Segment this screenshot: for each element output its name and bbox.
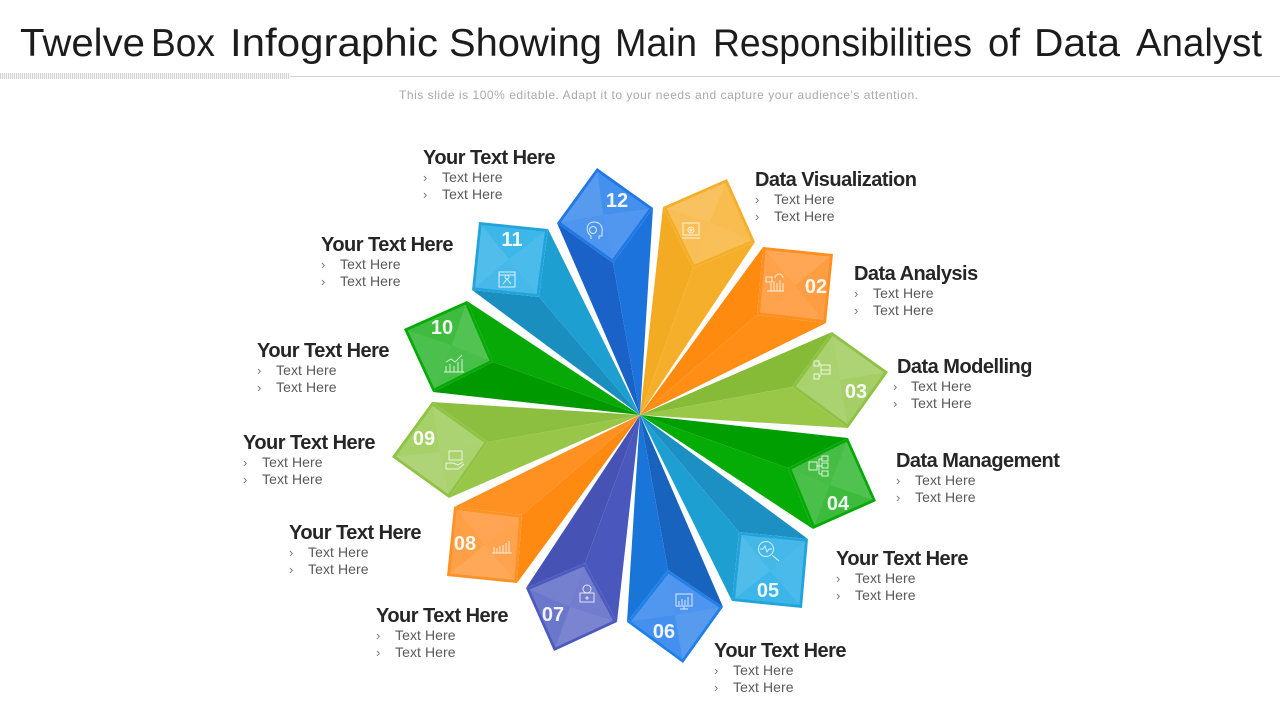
title: Data — [1034, 22, 1120, 65]
label 01: Data Visualization: › — [755, 209, 759, 224]
box 06 blue — [627, 415, 723, 663]
icon: monitor bars — [676, 594, 692, 609]
label 12: Text Here — [442, 169, 503, 185]
label 06: Your Text Here — [714, 640, 846, 662]
title: Analyst — [1136, 22, 1262, 65]
box 11 sky blue — [472, 222, 640, 415]
box 04 green — [640, 415, 876, 529]
label 12: Your Text Here — [423, 147, 555, 169]
label 02: Data Analysis: Data Analysis — [854, 263, 978, 285]
icon: monitor — [682, 223, 700, 238]
label 11: Your Text Here — [321, 234, 453, 256]
number 11: 11 — [501, 229, 523, 251]
title: Showing — [449, 22, 602, 65]
label 02: Data Analysis — [854, 263, 978, 318]
number 04: 04 — [827, 493, 850, 515]
label 06: Text Here — [733, 679, 794, 695]
label 01: Data Visualization — [755, 169, 916, 224]
label 11: Text Here — [340, 273, 401, 289]
label 03: Data Modelling: Text Here — [911, 378, 972, 394]
label 07: Text Here — [395, 644, 456, 660]
label 05: Text Here — [855, 570, 916, 586]
label 01: Data Visualization: Data Visualization — [755, 169, 916, 191]
text: › — [893, 379, 897, 394]
label 12: › — [423, 170, 427, 185]
icon: head — [587, 222, 602, 239]
box 08 orange — [447, 415, 640, 583]
label 05: › — [836, 571, 840, 586]
label 09: Text Here — [262, 454, 323, 470]
label 06: › — [714, 680, 718, 695]
label 01: Data Visualization: Text Here — [774, 191, 835, 207]
label 12: › — [423, 187, 427, 202]
number 08: 08 — [454, 533, 476, 555]
label 04: Data Management: Text Here — [915, 472, 976, 488]
label 04: Data Management — [896, 450, 1060, 505]
number 10: 10 — [431, 317, 453, 339]
box 09 lime — [392, 402, 640, 498]
title: Twelve — [20, 22, 145, 65]
icon: person laptop — [580, 585, 594, 602]
label 11 — [321, 234, 453, 289]
label 07: Your Text Here — [376, 605, 508, 627]
label 08: › — [289, 545, 293, 560]
label 10: Text Here — [276, 362, 337, 378]
label 09: Text Here — [262, 471, 323, 487]
label 02: Data Analysis: › — [854, 303, 858, 318]
label 08 — [289, 522, 421, 577]
number 12: 12 — [606, 190, 628, 212]
label 05: Your Text Here — [836, 548, 968, 570]
box 10 green — [404, 301, 640, 415]
label 09 — [243, 432, 375, 487]
label 08: Text Here — [308, 561, 369, 577]
box 02 orange — [640, 247, 833, 415]
title: Box — [151, 22, 215, 65]
label 05: › — [836, 588, 840, 603]
label 04: Data Management: › — [896, 473, 900, 488]
box 03 lime — [640, 332, 888, 428]
label 03: Data Modelling — [893, 356, 1032, 411]
label 09: Your Text Here — [243, 432, 375, 454]
label 12: Text Here — [442, 186, 503, 202]
label 11: Text Here — [340, 256, 401, 272]
label 10: Your Text Here — [257, 340, 389, 362]
title: Main — [615, 22, 697, 65]
box 01 yellow — [640, 179, 755, 415]
label 10 — [257, 340, 389, 395]
label 04: Data Management: Data Management — [896, 450, 1059, 472]
title: Infographic — [230, 22, 438, 65]
label 07: › — [376, 628, 380, 643]
icon: growth chart — [444, 355, 464, 372]
icon: hierarchy — [809, 456, 828, 476]
number 09: 09 — [413, 428, 435, 450]
label 08: Your Text Here — [289, 522, 421, 544]
number 06: 06 — [653, 621, 675, 643]
label 09: › — [243, 455, 247, 470]
title: of — [988, 22, 1020, 65]
label 10: › — [257, 363, 261, 378]
number 03: 03 — [845, 381, 867, 403]
label 03: Data Modelling: Data Modelling — [897, 356, 1032, 378]
label 05: Text Here — [855, 587, 916, 603]
subtitle: This slide is 100% editable. Adapt it to your needs and capture your audience's attention. — [399, 88, 918, 102]
label 08: › — [289, 562, 293, 577]
label 03: Data Modelling: Text Here — [911, 395, 972, 411]
label 10: Text Here — [276, 379, 337, 395]
label 04: Data Management: Text Here — [915, 489, 976, 505]
label 02: Data Analysis: Text Here — [873, 285, 934, 301]
label 07: Text Here — [395, 627, 456, 643]
number 07: 07 — [542, 604, 564, 626]
box 05 sky blue — [640, 415, 808, 608]
label 09: › — [243, 472, 247, 487]
label 02: Data Analysis: Text Here — [873, 302, 934, 318]
text: › — [893, 396, 897, 411]
label 02: Data Analysis: › — [854, 286, 858, 301]
title: Responsibilities — [713, 22, 972, 65]
icon: flow blocks — [814, 361, 830, 379]
label 07 — [376, 605, 508, 660]
icon: magnifier pulse — [758, 542, 779, 561]
label 08: Text Here — [308, 544, 369, 560]
label 04: Data Management: › — [896, 490, 900, 505]
number 02: 02 — [805, 276, 827, 298]
icon: hand with box — [446, 451, 464, 469]
label 11: › — [321, 257, 325, 272]
title — [20, 22, 1262, 65]
icon: framed person — [499, 272, 515, 287]
box 07 indigo — [526, 415, 640, 651]
label 01: Data Visualization: › — [755, 192, 759, 207]
label 01: Data Visualization: Text Here — [774, 208, 835, 224]
label 06: Text Here — [733, 662, 794, 678]
icon: bar chart — [492, 541, 512, 553]
box 12 blue — [557, 168, 653, 415]
label 10: › — [257, 380, 261, 395]
label 12 — [423, 147, 555, 202]
label 06: › — [714, 663, 718, 678]
icon: chart cloud — [766, 274, 784, 291]
label 07: › — [376, 645, 380, 660]
label 05 — [836, 548, 968, 603]
label 06 — [714, 640, 846, 695]
label 11: › — [321, 274, 325, 289]
number 05: 05 — [757, 580, 779, 602]
